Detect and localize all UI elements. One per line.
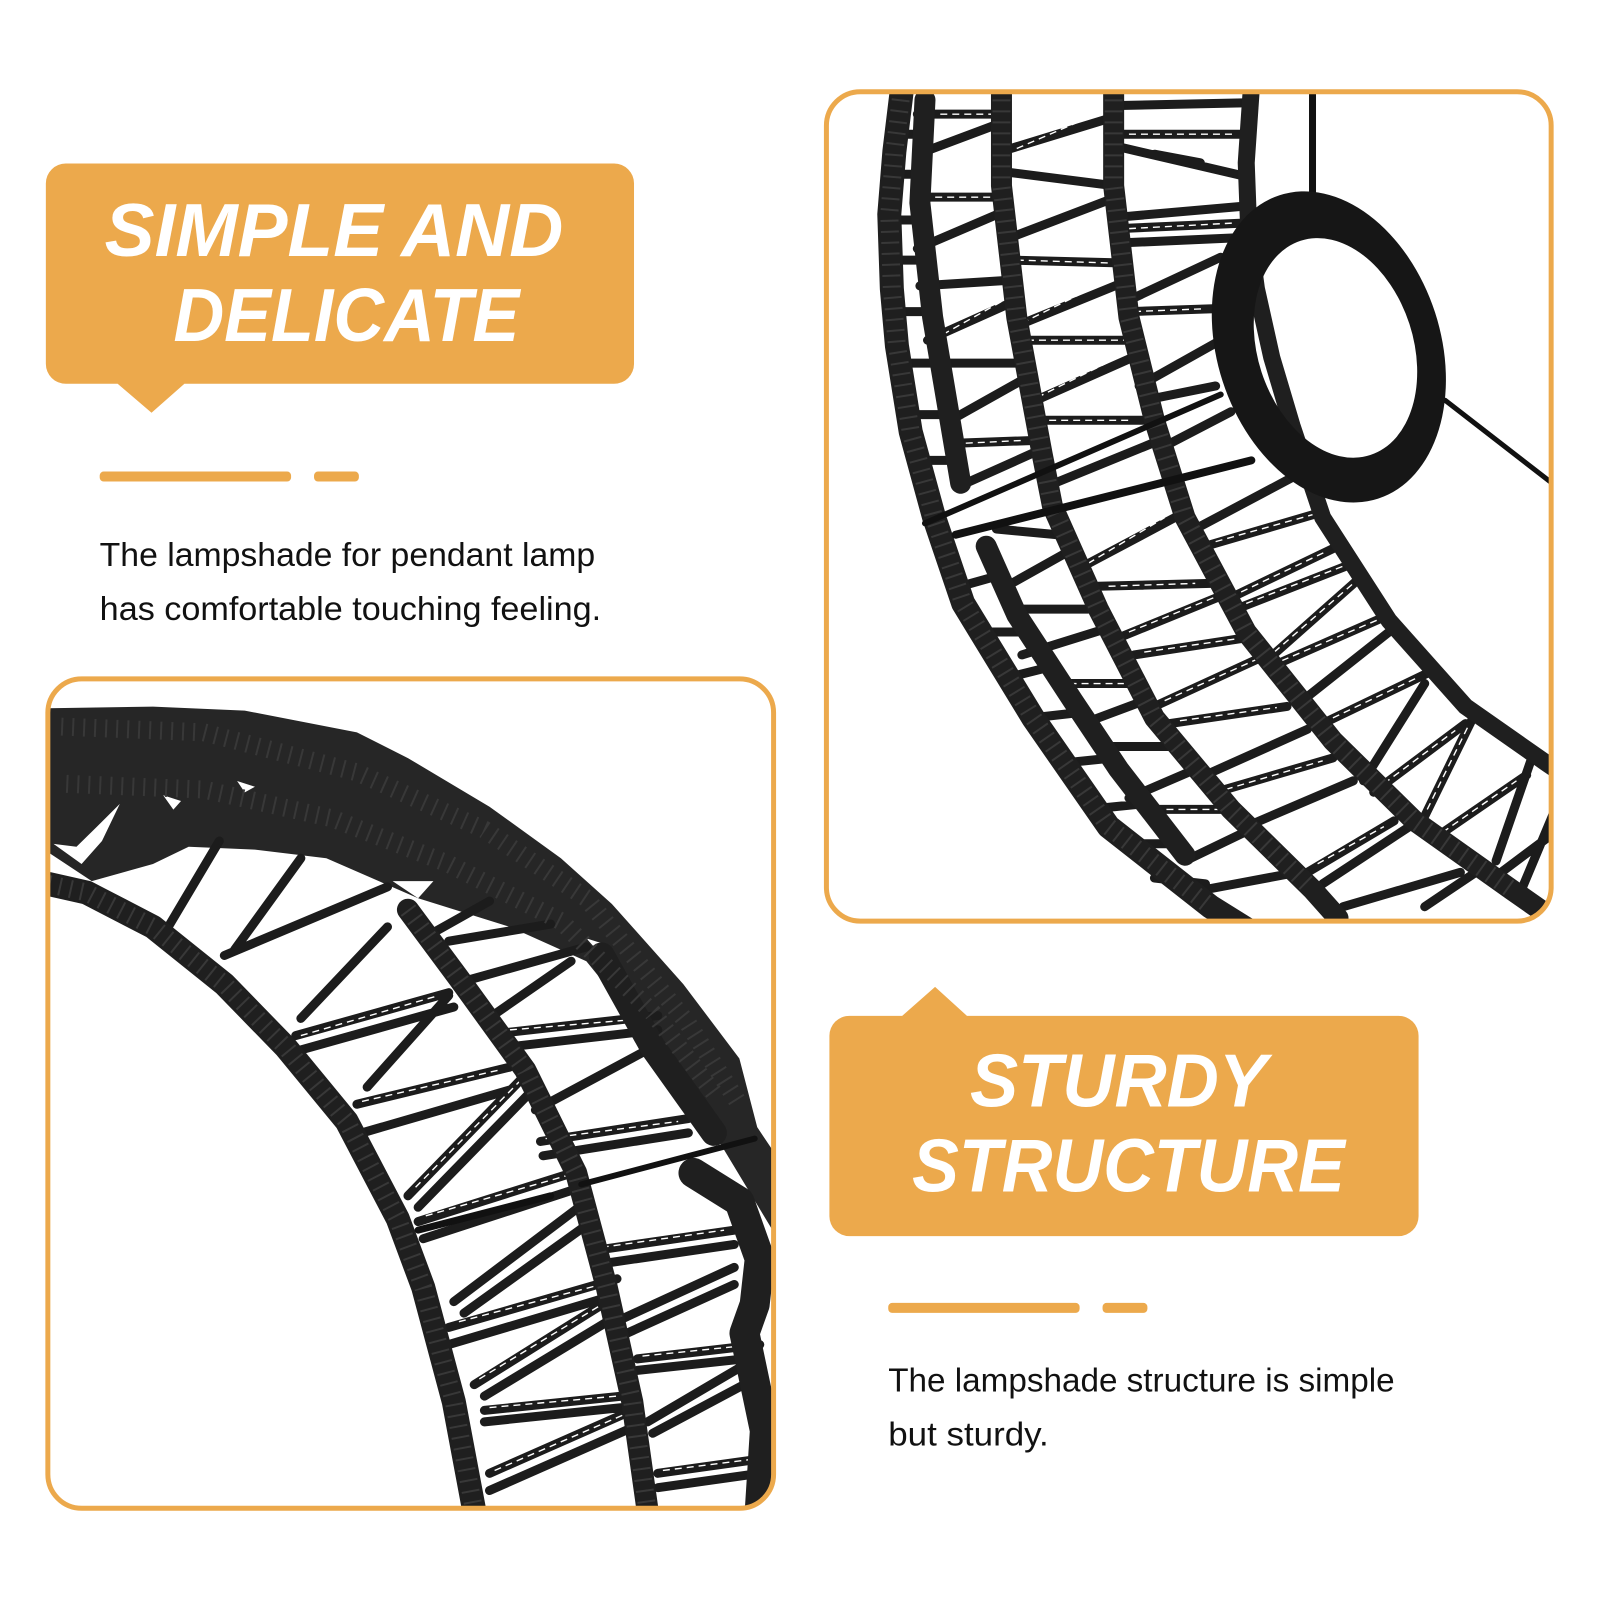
panel: lampshade woven rim close-up xyxy=(48,679,774,1511)
callout: simple and delicate: DELICATE xyxy=(173,273,521,357)
text block: lampshade touch description: The lampshade for pendant lamp xyxy=(100,536,595,573)
panel border xyxy=(48,679,774,1508)
callout: sturdy structure xyxy=(829,987,1419,1236)
callout: sturdy structure: STRUCTURE xyxy=(912,1123,1347,1207)
divider: lower right accent bars xyxy=(888,1303,1147,1313)
callout: sturdy structure: STURDY xyxy=(970,1039,1273,1123)
panel border xyxy=(826,92,1551,921)
callout: simple and delicate xyxy=(46,163,634,413)
text block: lampshade structure description: The lampshade structure is simple xyxy=(888,1362,1395,1399)
text block: lampshade touch description: has comfortable touching feeling. xyxy=(100,590,601,627)
text block: lampshade structure description: but sturdy. xyxy=(888,1415,1049,1452)
panel: lampshade top ring close-up xyxy=(826,88,1573,935)
callout: simple and delicate: SIMPLE AND xyxy=(105,188,563,272)
lampshade weave with metal ring xyxy=(889,88,1573,935)
lampshade weave band xyxy=(48,707,773,1511)
text block: lampshade structure description xyxy=(888,1362,1395,1452)
divider: top left accent bars xyxy=(100,472,359,481)
text block: lampshade touch description xyxy=(100,536,601,627)
